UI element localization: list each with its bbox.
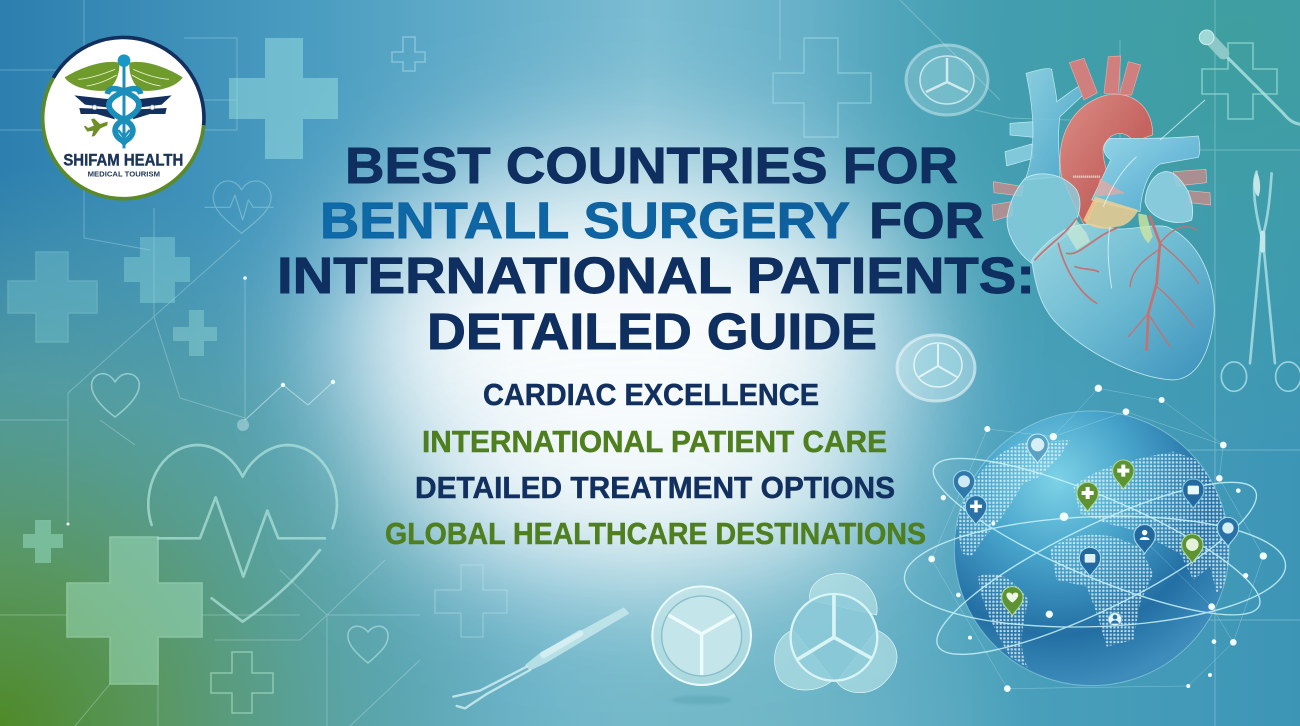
vessels: side stubs [992, 169, 1211, 221]
pulmonary artery [1092, 136, 1200, 212]
subtitle 4: GLOBAL HEALTHCARE DESTINATIONS [385, 516, 926, 551]
pin: blue east [1217, 517, 1239, 547]
caduceus staff [107, 54, 141, 148]
heart outline: left [92, 374, 139, 417]
subtitle 3: DETAILED TREATMENT OPTIONS [415, 470, 895, 505]
pin: green tree [1182, 534, 1203, 563]
heart with pulse: top [205, 181, 273, 233]
decorative hearts and pulse [92, 181, 388, 663]
coronary arteries [1035, 217, 1198, 350]
glowing nodes [928, 385, 1267, 692]
title line 3: INTERNATIONAL PATIENTS: [277, 247, 1035, 304]
main title [277, 137, 1035, 360]
large heart with pulse [148, 445, 337, 622]
cross: left [8, 252, 97, 342]
valve: top [906, 45, 988, 115]
wing rivets [92, 105, 155, 110]
pale patch [1067, 220, 1090, 250]
cross: top right outline [1202, 43, 1277, 119]
valve: middle [897, 335, 975, 401]
green wings [65, 62, 183, 91]
cross: big green [67, 537, 202, 684]
logo badge [43, 37, 204, 199]
hemostat scissors [1221, 172, 1300, 391]
cross: top centre outline [773, 38, 871, 137]
pin: blue cross [965, 496, 987, 525]
subtitle list [385, 377, 926, 551]
plane icon [84, 118, 108, 137]
navy wings [74, 95, 172, 119]
forceps [453, 607, 629, 708]
green patch [1138, 213, 1153, 243]
logo tagline: MEDICAL TOURISM [88, 172, 160, 179]
cross: outline bottom [211, 652, 273, 713]
globe network [903, 385, 1287, 692]
pin: blue person [1134, 525, 1155, 554]
globe sphere [954, 411, 1229, 686]
subtitle 2: INTERNATIONAL PATIENT CARE [422, 424, 887, 459]
pin: blue clinic [1183, 479, 1204, 508]
graft patch [1083, 197, 1138, 229]
left atrium [1145, 172, 1193, 223]
cross: faint bottom [435, 565, 507, 637]
valve: bottom lobed [775, 573, 897, 693]
continents [957, 440, 1233, 668]
network links [932, 388, 1263, 689]
location pins [953, 434, 1239, 626]
heart highlights [1103, 100, 1205, 288]
pin: blue hospital [1079, 547, 1101, 577]
pin: green heart [1002, 587, 1023, 616]
pulse nodes line [245, 382, 333, 420]
right atrium [1007, 174, 1080, 263]
title line 4: DETAILED GUIDE [427, 303, 877, 360]
cross: small [173, 310, 217, 356]
ventricles [1032, 224, 1214, 380]
cross: top large [229, 38, 338, 159]
valve: bottom round [652, 586, 751, 705]
cross: mid left [124, 237, 190, 303]
cross: top small outline [392, 37, 425, 71]
cross: green small [23, 520, 63, 563]
aortic arch [1060, 94, 1153, 227]
pin: blue medical [953, 471, 975, 500]
wing highlights [78, 69, 169, 86]
vena cava [1025, 69, 1088, 180]
title line 2: FOR [869, 192, 984, 249]
anatomical heart illustration [992, 56, 1214, 380]
pin: green cross [1077, 482, 1098, 512]
pin: round person [1108, 613, 1122, 626]
small nodes [66, 276, 335, 526]
pin: pale [1027, 434, 1048, 463]
logo name: SHIFAM HEALTH [63, 151, 183, 170]
orbit rings [903, 431, 1287, 683]
pin: green cross top [1113, 460, 1134, 489]
surgical scope: top right [1199, 30, 1300, 124]
vessels: blue stubs [1005, 122, 1033, 166]
title line 2: BENTALL SURGERY [320, 192, 850, 249]
subtitle 1: CARDIAC EXCELLENCE [483, 377, 819, 412]
aortic branches [1069, 56, 1141, 100]
title line 1: BEST COUNTRIES FOR [345, 137, 958, 194]
heart outline: bottom [348, 626, 388, 663]
badge circle [43, 37, 204, 199]
